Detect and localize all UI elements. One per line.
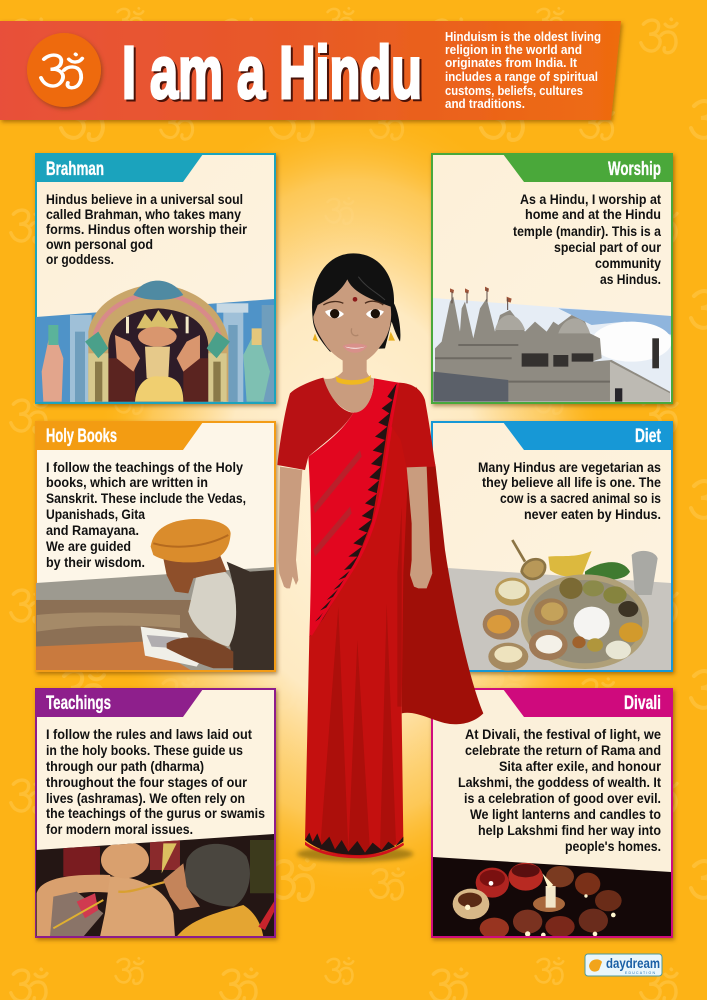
panel: Holy Books [33, 422, 277, 672]
intro text: customs, beliefs, cultures [445, 84, 583, 98]
body text: I follow the rules and laws laid out [46, 727, 252, 742]
photo: holy man reading [33, 519, 277, 672]
body text: celebrate the return of Rama and [465, 743, 661, 758]
arms and hands [278, 467, 302, 588]
head [312, 253, 400, 365]
body text: Upanishads, Gita [46, 507, 145, 522]
heading band: Diet [635, 426, 661, 447]
body text: called Brahman, who takes many [46, 207, 241, 222]
body text: or goddess. [46, 252, 114, 267]
photo: divali lamps [433, 855, 673, 939]
body text: for modern moral issues. [46, 822, 193, 837]
panel: Brahman [36, 154, 276, 405]
intro text: includes a range of spiritual [445, 70, 598, 84]
heading band: Holy Books [46, 426, 117, 447]
body text: throughout the four stages of our [46, 775, 248, 790]
body text: As a Hindu, I worship at [520, 192, 661, 207]
title [122, 31, 424, 116]
photo: sacred thread ceremony [33, 832, 277, 938]
body text [478, 460, 661, 522]
body text: and Ramayana. [46, 523, 139, 538]
body text: special part of our [554, 240, 662, 255]
heading band [503, 154, 672, 182]
sash sawtooth border [309, 383, 397, 637]
body text: I follow the teachings of the Holy [46, 460, 243, 475]
illustration: girl in red sari [277, 253, 483, 862]
body text [458, 727, 662, 854]
panel: Worship [432, 154, 673, 405]
body text: the teachings of the gurus or swamis [46, 806, 265, 821]
photo: Brahma temple sculpture [36, 281, 276, 405]
title: I am a Hindu [122, 31, 422, 114]
body text: lives (ashramas). We often rely on [46, 791, 245, 806]
body text: home and at the Hindu [525, 207, 661, 222]
body text: own personal god [46, 237, 153, 252]
body text: help Lakshmi find her way into [478, 823, 661, 838]
body text: Hindus believe in a universal soul [46, 192, 243, 207]
intro text: Hinduism is the oldest living [445, 30, 601, 44]
body text: Sita after exile, and honour [499, 759, 662, 774]
panel: Divali [432, 689, 673, 939]
heading band [503, 422, 672, 450]
body text: Many Hindus are vegetarian as [478, 460, 661, 475]
intro text: originates from India. It [445, 56, 578, 70]
necklace [336, 375, 371, 385]
logo: daydream education: daydream [606, 955, 660, 971]
body text: is a celebration of good over evil. [464, 791, 661, 806]
body text: in the holy books. These guide us [46, 743, 243, 758]
intro text [445, 30, 601, 111]
sash [308, 378, 398, 637]
heading band [36, 689, 203, 717]
body text: community [595, 256, 661, 271]
hem border [305, 833, 403, 855]
body text: We light lanterns and candles to [470, 807, 661, 822]
body text: We are guided [46, 539, 131, 554]
heading band: Teachings [46, 693, 111, 714]
body text: by their wisdom. [46, 555, 145, 570]
body text: Sanskrit. These include the Vedas, [46, 491, 246, 506]
logo: daydream education: EDUCATION [625, 971, 655, 975]
sari drape [402, 387, 483, 724]
body text [46, 192, 248, 267]
title: I am a Hindu [124, 33, 424, 116]
body text [46, 460, 246, 570]
body text: temple (mandir). This is a [513, 224, 661, 239]
body text: people's homes. [565, 839, 661, 854]
body text: they believe all life is one. The [482, 475, 661, 490]
intro text: and traditions. [445, 97, 525, 111]
photo: Hindu temple [433, 287, 673, 405]
panel: Teachings [33, 689, 277, 938]
heading band [36, 154, 203, 182]
body text: as Hindus. [600, 272, 661, 287]
panel: Diet [432, 422, 673, 671]
sari skirt [305, 383, 408, 857]
body text: through our path (dharma) [46, 759, 204, 774]
heading band [36, 422, 203, 450]
body text [513, 192, 662, 287]
heading band: Worship [608, 159, 661, 180]
photo: thali meal [433, 540, 673, 671]
body text: At Divali, the festival of light, we [465, 727, 661, 742]
title banner [0, 21, 621, 120]
body text: cow is a sacred animal so is [500, 491, 661, 506]
body text: forms. Hindus often worship their [46, 222, 248, 237]
neck and chest [323, 357, 374, 413]
heading band: Divali [624, 693, 661, 714]
body text: books, which are written in [46, 475, 208, 490]
blouse [277, 378, 353, 470]
body text [46, 727, 265, 837]
heading band: Brahman [46, 159, 104, 180]
logo: daydream education [585, 954, 662, 976]
icon: om circle [27, 33, 101, 107]
intro text: religion in the world and [445, 43, 582, 57]
heading band [503, 689, 672, 717]
body text: Lakshmi, the goddess of wealth. It [458, 775, 661, 790]
body text: never eaten by Hindus. [524, 507, 661, 522]
